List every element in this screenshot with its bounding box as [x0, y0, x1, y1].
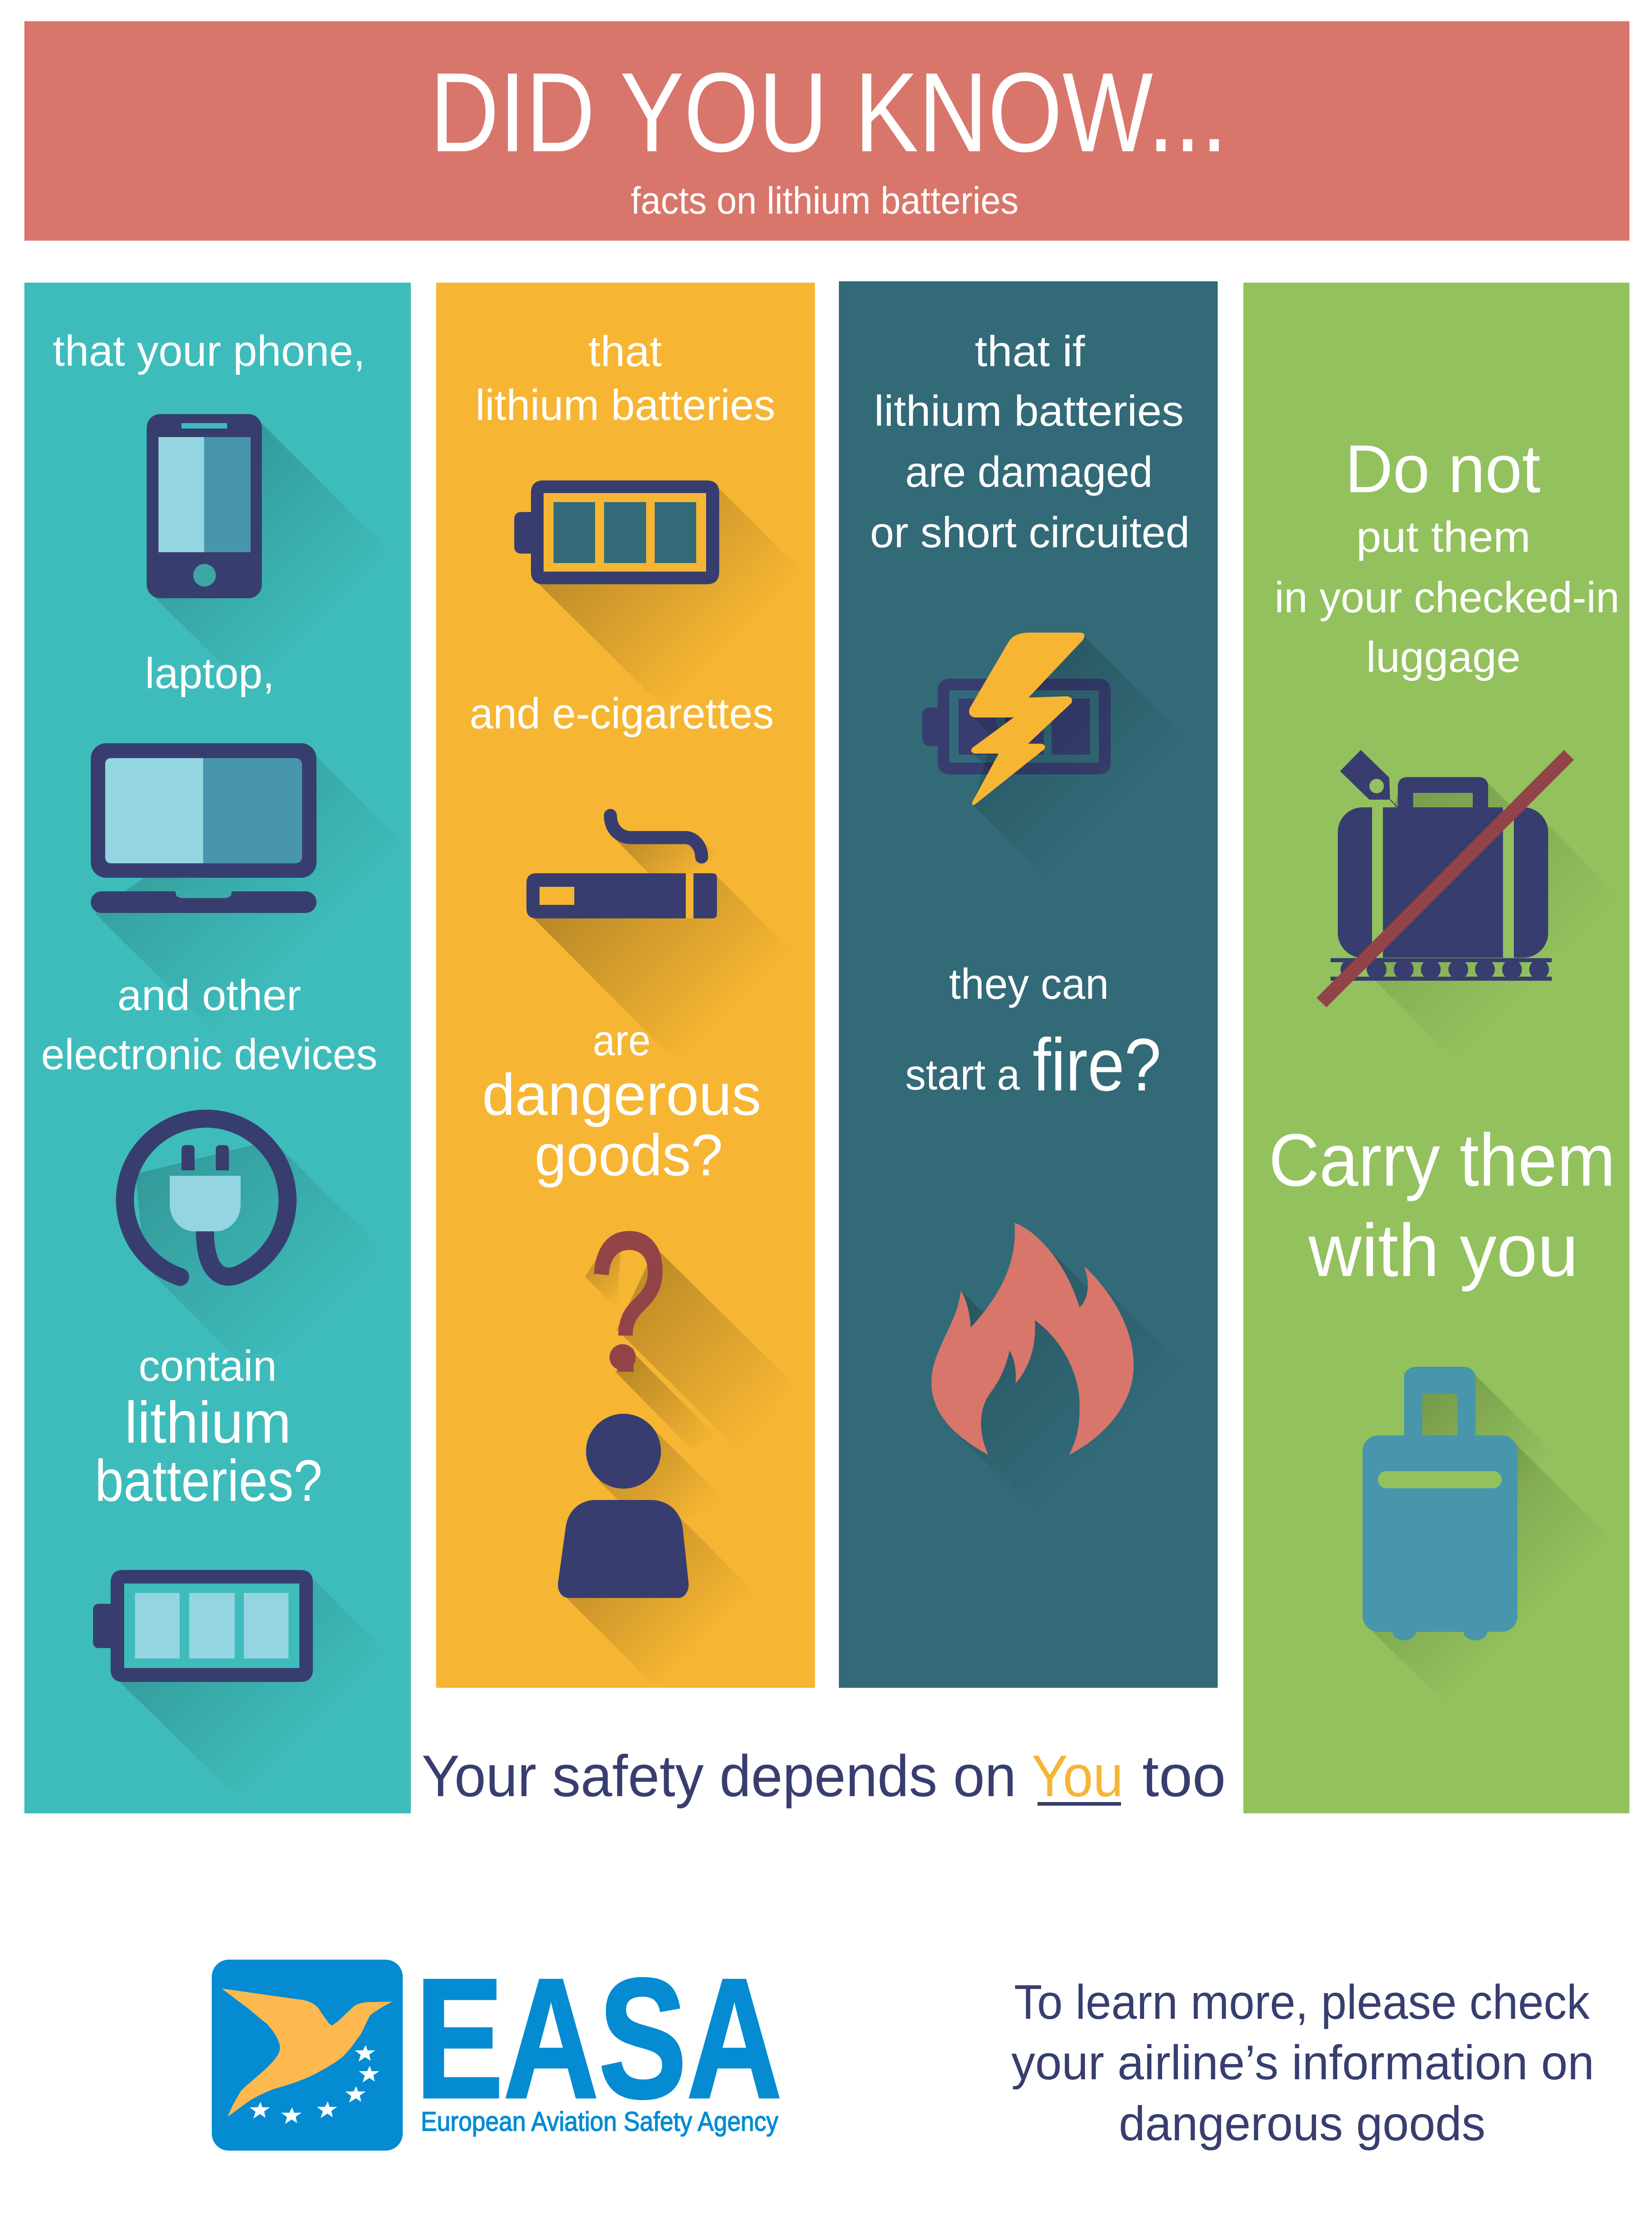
icon: e-cigarette	[526, 815, 717, 918]
icon: laptop	[91, 743, 316, 913]
icon shadows, dark teal panel	[959, 637, 1141, 1459]
icon: full battery	[93, 1570, 313, 1682]
text: and other electronic devices	[41, 971, 377, 1079]
text: that lithium batteries: lithium batteries	[475, 381, 775, 429]
text: to learn more: To learn more, please check	[1014, 1975, 1590, 2029]
text: do not put them in your checked-in luggage	[1275, 431, 1619, 681]
text: carry them with you: Carry them	[1269, 1118, 1615, 1202]
icon: electric plug	[125, 1119, 288, 1277]
icon: smartphone	[147, 414, 262, 598]
text: and other electronic devices: electronic devices	[41, 1030, 377, 1079]
tagline: your safety depends on you too: too	[1142, 1743, 1226, 1809]
text: that your phone: that your phone,	[53, 327, 365, 375]
text: do not put them in your checked-in luggage: put them	[1356, 513, 1531, 561]
icon shadows, teal panel	[95, 423, 371, 1770]
panel: devices contain lithium batteries	[24, 283, 451, 1813]
title: DID YOU KNOW...	[430, 49, 1228, 175]
text: that if lithium batteries are damaged or short circuited: that if	[975, 327, 1085, 376]
text: carry them with you: with you	[1308, 1209, 1578, 1292]
text: they can start a fire?: fire?	[1033, 1023, 1161, 1106]
text: to learn more: dangerous goods	[1119, 2096, 1485, 2151]
text: that lithium batteries: that	[588, 327, 662, 376]
logo wordmark: EASA	[415, 1943, 782, 2134]
icon: flame	[931, 1223, 1134, 1455]
text: are dangerous goods?	[482, 1016, 761, 1188]
header banner	[24, 21, 1629, 241]
text: they can start a fire?: start a	[905, 1051, 1020, 1099]
tagline: your safety depends on you too: Your safety depends on	[422, 1743, 1016, 1809]
text: to learn more	[1011, 1975, 1594, 2151]
icon: crossed-out suitcase on conveyor	[1317, 750, 1574, 1007]
text: that if lithium batteries are damaged or short circuited: lithium batteries	[874, 387, 1184, 435]
logo: EASA	[212, 1943, 782, 2151]
icon: wheeled cabin bag	[1363, 1367, 1517, 1640]
text: and e-cigarettes: and e-cigarettes	[470, 689, 774, 738]
text: contain lithium batteries?: contain	[139, 1342, 277, 1390]
icon shadows, green panel	[1352, 782, 1584, 1677]
panel: damaged batteries can start a fire	[839, 281, 1218, 1688]
text: do not put them in your checked-in luggage: in your checked-in	[1275, 573, 1619, 622]
text: contain lithium batteries?: lithium	[125, 1389, 291, 1455]
text: that if lithium batteries are damaged or short circuited: or short circuited	[870, 508, 1190, 557]
text: carry them with you	[1269, 1118, 1615, 1292]
panel: do not put in checked-in luggage, carry them	[1243, 283, 1629, 1813]
text: that if lithium batteries are damaged or short circuited: are damaged	[905, 448, 1153, 496]
text: that if lithium batteries are damaged or short circuited	[870, 327, 1190, 557]
text: are dangerous goods?: goods?	[535, 1122, 723, 1188]
subtitle: facts on lithium batteries	[631, 179, 1019, 222]
text: that lithium batteries	[475, 327, 775, 429]
text: they can start a fire?	[905, 960, 1161, 1106]
icon: person	[558, 1414, 689, 1598]
text: do not put them in your checked-in luggage: Do not	[1345, 431, 1540, 507]
icon: lightning bolt	[969, 633, 1084, 805]
text: do not put them in your checked-in luggage: luggage	[1366, 633, 1521, 681]
text: and other electronic devices: and other	[117, 971, 301, 1020]
logo emblem: bird and stars	[212, 1960, 403, 2151]
panel: lithium batteries are dangerous goods	[436, 283, 815, 1693]
text: are dangerous goods?: dangerous	[482, 1062, 761, 1127]
logo strapline: European Aviation Safety Agency	[421, 2106, 778, 2137]
text: contain lithium batteries?: batteries?	[95, 1448, 322, 1514]
text: to learn more: your airline’s information on	[1011, 2035, 1594, 2090]
text: are dangerous goods?: are	[593, 1016, 651, 1065]
icon shadows, orange panel	[533, 488, 784, 1672]
icon: question mark: ?	[590, 1192, 666, 1412]
icon: battery behind lightning bolt	[922, 679, 1111, 774]
icon: battery	[514, 480, 719, 584]
text: contain lithium batteries?	[95, 1342, 322, 1514]
tagline: your safety depends on you too: You	[1032, 1743, 1123, 1809]
text: they can start a fire?: they can	[949, 960, 1109, 1008]
text: laptop: laptop,	[145, 649, 275, 698]
